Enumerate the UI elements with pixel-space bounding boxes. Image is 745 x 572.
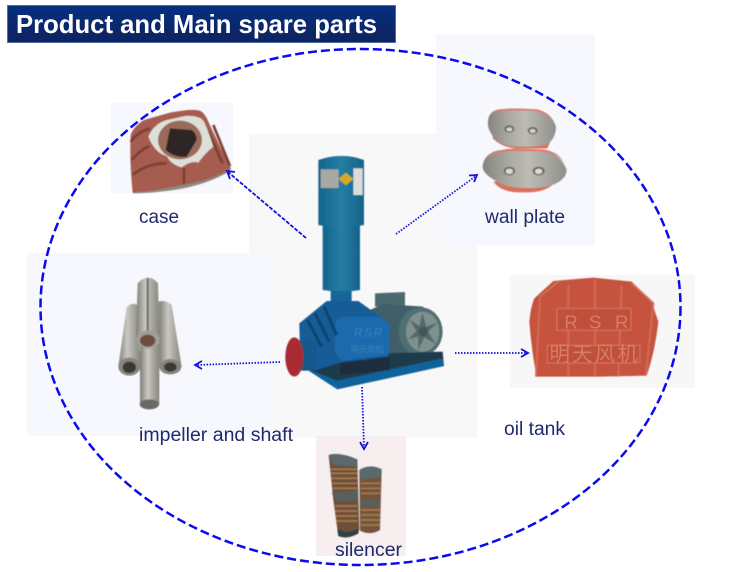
icon: impeller and shaft part: [118, 277, 182, 409]
label: impeller and shaft: impeller and shaft: [139, 425, 294, 446]
panel: case background: [111, 103, 233, 193]
arrow: to wall plate: [396, 175, 477, 234]
icon: roots blower product: RSR: [354, 326, 383, 340]
arrow: to case: [227, 171, 306, 238]
icon: roots blower product: [285, 156, 444, 389]
icon: roots blower product: 明天风机: [351, 344, 384, 355]
panel: impeller background: [27, 253, 272, 436]
icon: oil tank part: S: [589, 311, 601, 332]
icon: silencer part: [329, 454, 382, 537]
motor: [375, 292, 405, 307]
panel: silencer background: [316, 436, 406, 556]
title banner: Product and Main spare parts: [16, 9, 377, 39]
column: [323, 225, 360, 292]
icon: oil tank part: R: [615, 311, 628, 332]
dashed ellipse boundary: [40, 49, 680, 565]
label: wall plate: wall plate: [484, 207, 565, 228]
icon: oil tank part: 明天风机: [549, 343, 638, 366]
icon: case part: [130, 110, 231, 193]
label: oil tank: oil tank: [504, 419, 566, 440]
panel: oil tank background: [510, 275, 695, 388]
base: [305, 352, 444, 389]
inlet with red disc: [295, 341, 317, 371]
icon: oil tank part: R: [564, 311, 578, 332]
arrow: to impeller and shaft: [195, 361, 280, 369]
panel: wall plate background: [436, 34, 595, 246]
icon: wall plate part: [483, 108, 567, 192]
arrow: to oil tank: [455, 349, 528, 357]
label: silencer: silencer: [335, 540, 403, 561]
icon: oil tank part: [529, 278, 658, 377]
arrow: to silencer: [360, 387, 368, 449]
label: case: case: [139, 207, 179, 228]
blower body: [299, 301, 388, 370]
panel: blower background: [249, 134, 477, 438]
